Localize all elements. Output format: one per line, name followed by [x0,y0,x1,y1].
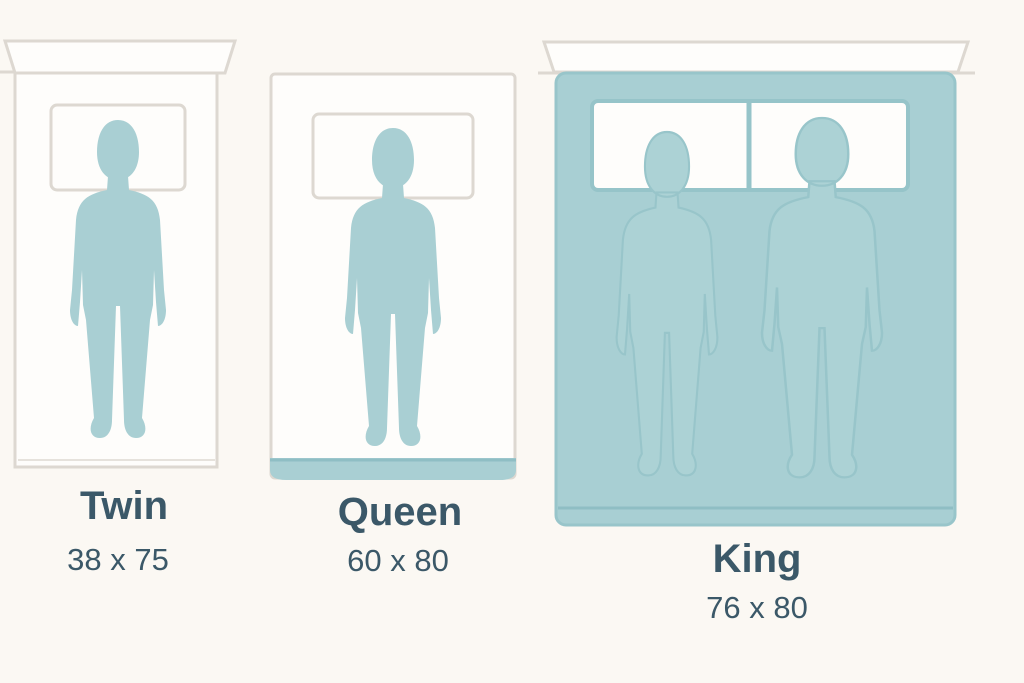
pillows: king [592,101,908,190]
label: queen: Queen [338,490,462,534]
dims: queen: 60 x 80 [347,543,449,578]
bed: twin [0,41,235,467]
person: king woman [617,132,717,475]
label: king: King [713,537,801,581]
pillow: twin [51,105,185,190]
dims: twin: 38 x 75 [67,542,169,577]
bed: queen [270,74,516,480]
person: queen [345,128,441,446]
label: twin: Twin [80,484,168,528]
pillow: queen [313,114,473,198]
person: twin [70,120,166,438]
dims: king: 76 x 80 [706,590,808,625]
person: king man [762,118,882,477]
bed: king [538,42,975,525]
